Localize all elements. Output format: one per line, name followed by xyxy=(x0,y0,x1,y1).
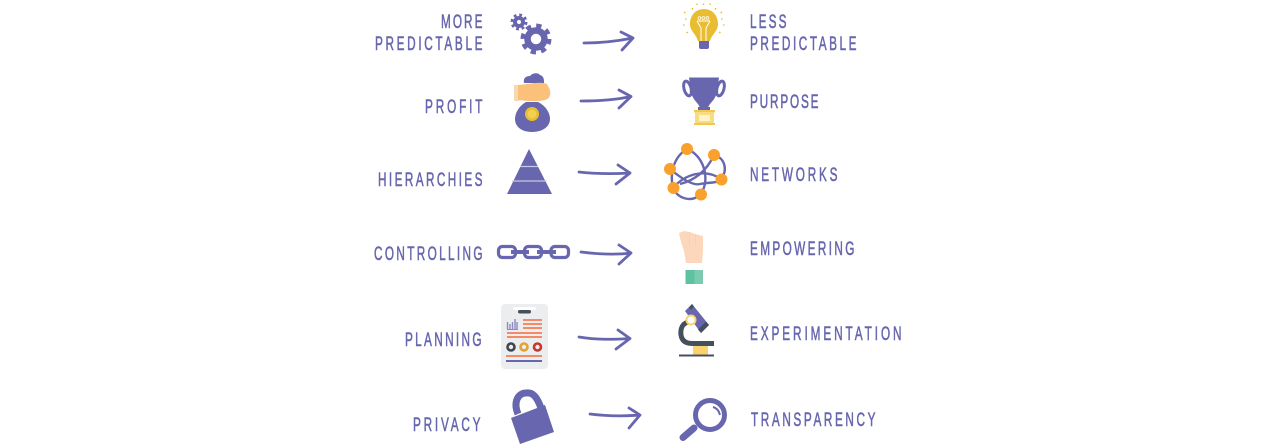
label: privacy: PRIVACY xyxy=(413,415,481,436)
icon: magnifying glass xyxy=(683,400,724,438)
arrow 3 xyxy=(579,165,630,184)
label: purpose: PURPOSE xyxy=(750,92,819,113)
label: more predictable xyxy=(375,12,483,55)
label: controlling: CONTROLLING xyxy=(374,244,482,265)
icon: network xyxy=(664,143,728,200)
label: transparency: TRANSPARENCY xyxy=(751,410,876,431)
label: less predictable xyxy=(750,12,857,55)
label: less predictable: LESS xyxy=(750,12,787,33)
label: less predictable: PREDICTABLE xyxy=(750,34,857,55)
label: planning: PLANNING xyxy=(405,330,482,351)
icon: microscope xyxy=(679,304,714,356)
label: profit: PROFIT xyxy=(425,97,483,118)
arrow 4 xyxy=(581,245,631,264)
label: more predictable: PREDICTABLE xyxy=(375,34,483,55)
icon: light bulb xyxy=(683,4,724,49)
arrow 6 xyxy=(590,408,640,428)
arrow 5 xyxy=(579,330,630,349)
icon: trophy xyxy=(682,78,726,125)
icon: gears xyxy=(512,15,550,52)
arrow 1 xyxy=(584,32,633,50)
label: networks: NETWORKS xyxy=(750,165,837,186)
icon: hand holding money bag xyxy=(514,73,550,132)
arrow 2 xyxy=(581,90,631,108)
icon: chain xyxy=(498,246,568,258)
label: experimentation: EXPERIMENTATION xyxy=(750,324,902,345)
icon: report clipboard xyxy=(501,304,548,369)
icon: padlock xyxy=(511,393,554,444)
icon: raised fist xyxy=(679,231,703,284)
label: more predictable: MORE xyxy=(441,12,482,33)
label: hierarchies: HIERARCHIES xyxy=(378,170,482,191)
icon: pyramid xyxy=(507,149,552,194)
label: empowering: EMPOWERING xyxy=(750,239,854,260)
